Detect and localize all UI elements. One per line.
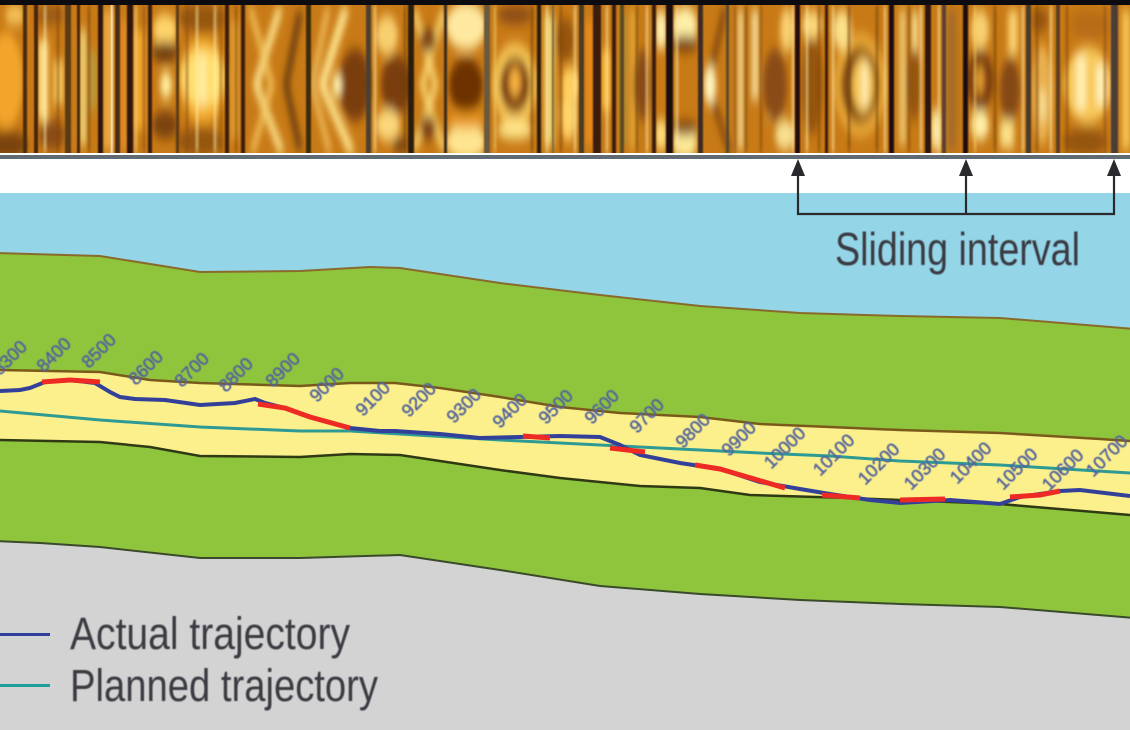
- depth labels: 10400: [946, 438, 996, 488]
- sliding segments in red: [42, 380, 1060, 500]
- depth labels: 8900: [262, 349, 304, 391]
- depth labels: 10300: [900, 444, 950, 494]
- planned trajectory line: [0, 411, 1130, 473]
- depth labels: 8700: [171, 349, 213, 391]
- depth labels: 10500: [992, 444, 1042, 494]
- depth labels: 9500: [535, 386, 577, 428]
- depth labels: 9600: [581, 386, 623, 428]
- depth labels: 10600: [1038, 445, 1088, 495]
- image log strip: [0, 2, 1130, 160]
- reservoir bottom boundary: [0, 440, 1130, 515]
- depth labels: 9100: [352, 378, 394, 420]
- strip bottom border: [0, 155, 1130, 159]
- fine vertical streaks: [44, 5, 1106, 153]
- depth labels: 8600: [125, 347, 167, 389]
- reservoir top boundary: [0, 370, 1130, 441]
- sky layer: [0, 193, 1130, 333]
- depth labels: 9700: [626, 395, 668, 437]
- yellow reservoir layer: [0, 370, 1130, 515]
- depth labels: [0, 330, 1130, 495]
- depth labels: 9300: [443, 385, 485, 427]
- depth labels: 9900: [718, 418, 760, 460]
- dark vertical bars: [23, 5, 1118, 153]
- depth labels: 9000: [306, 364, 348, 406]
- depth labels: 10000: [760, 423, 810, 473]
- depth labels: 9200: [398, 379, 440, 421]
- depth labels: 8500: [78, 330, 120, 372]
- depth labels: 8400: [33, 334, 75, 376]
- legend: planned trajectory: Planned trajectory: [70, 660, 378, 711]
- depth labels: 9800: [672, 410, 714, 452]
- legend: actual trajectory: Actual trajectory: [70, 608, 350, 659]
- sliding interval bracket with arrows: [791, 159, 1121, 214]
- depth labels: 10100: [809, 430, 859, 480]
- sliding interval label: Sliding interval: [835, 223, 1080, 275]
- lower green layer: [0, 438, 1130, 618]
- strip top border: [0, 0, 1130, 5]
- legend: [0, 608, 378, 711]
- upper green layer: [0, 253, 1130, 520]
- depth labels: 8800: [215, 354, 257, 396]
- grey basement layer: [0, 541, 1130, 730]
- depth labels: 10200: [854, 439, 904, 489]
- actual trajectory line: [0, 380, 1130, 504]
- depth labels: 9400: [489, 390, 531, 432]
